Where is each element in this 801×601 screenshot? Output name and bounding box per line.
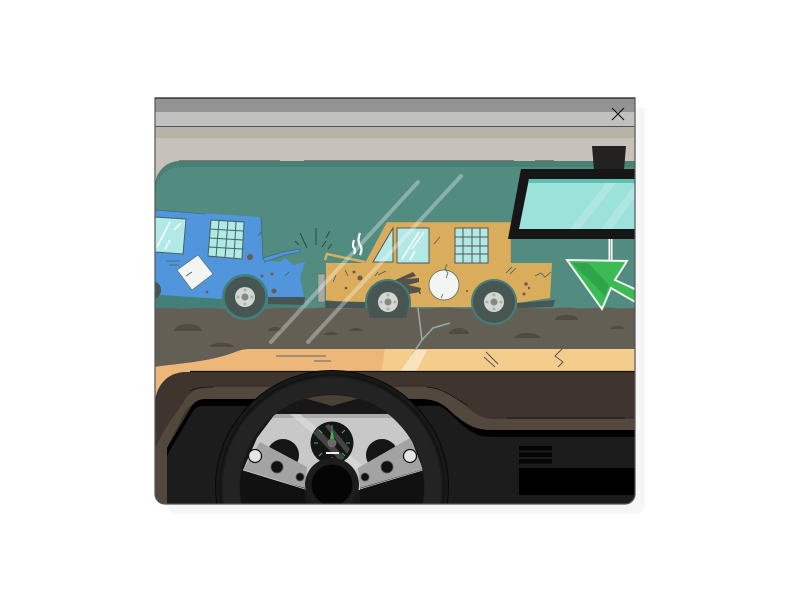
steam (353, 233, 362, 255)
road glare (400, 350, 427, 372)
blue car window (155, 217, 186, 254)
orange crashed car (318, 222, 555, 325)
front wheel (365, 279, 411, 318)
wheel hub (305, 458, 359, 512)
crumpled orange hood (325, 254, 365, 262)
lower panels (235, 469, 430, 505)
steering wheel (216, 370, 448, 601)
wheel rim (216, 370, 448, 601)
white dent (429, 270, 459, 300)
right spoke (358, 438, 423, 488)
blue car wheel (222, 274, 268, 320)
window border (155, 98, 635, 504)
close icon (612, 108, 624, 120)
orange bumper (318, 274, 325, 302)
left spoke (243, 442, 307, 488)
impact lines (295, 228, 332, 249)
white buttons (248, 450, 416, 462)
rear wheel (471, 279, 517, 325)
blue car bumper (268, 297, 305, 305)
mirror frame (508, 169, 636, 239)
vents (519, 446, 552, 464)
illustration: view through a windshield (154, 97, 645, 514)
rear-view mirror (508, 146, 636, 239)
gauge plate (243, 414, 423, 490)
windshield glare (271, 176, 461, 342)
dashboard trim (155, 387, 636, 504)
blue car lower strip (155, 294, 305, 308)
ground (155, 308, 635, 372)
orange car lower trim (325, 300, 555, 308)
windshield crack (412, 308, 450, 355)
teal background (155, 161, 635, 320)
blue crashed car (143, 210, 305, 320)
left dial (267, 439, 299, 471)
blue car roof line (155, 210, 263, 258)
road (156, 349, 634, 397)
blue car body (155, 210, 305, 299)
radio slot (519, 468, 636, 495)
mirror glass (519, 179, 636, 229)
windscreen (373, 228, 393, 262)
blue car rear wheel (156, 282, 161, 298)
mirror mount (592, 146, 626, 170)
car ceiling (155, 127, 635, 178)
paper patch (177, 255, 213, 290)
crumpled hood (263, 249, 300, 262)
orange car grid window (455, 228, 488, 263)
window shadow (167, 108, 645, 514)
title bar (155, 98, 635, 128)
wheel inner (235, 394, 430, 505)
bolts (271, 461, 393, 481)
instrument panel (167, 401, 636, 504)
blue car grid window (208, 220, 244, 259)
dashboard top (155, 372, 635, 504)
right dial (366, 439, 398, 471)
centre gauge (310, 422, 354, 464)
glare on plate (290, 414, 362, 470)
dashboard (155, 372, 636, 504)
side window (397, 228, 429, 263)
scorch mark (395, 272, 421, 294)
window (156, 98, 634, 504)
mirror stem (608, 239, 612, 260)
orange car body (326, 222, 552, 307)
green cursor arrow (567, 260, 637, 309)
